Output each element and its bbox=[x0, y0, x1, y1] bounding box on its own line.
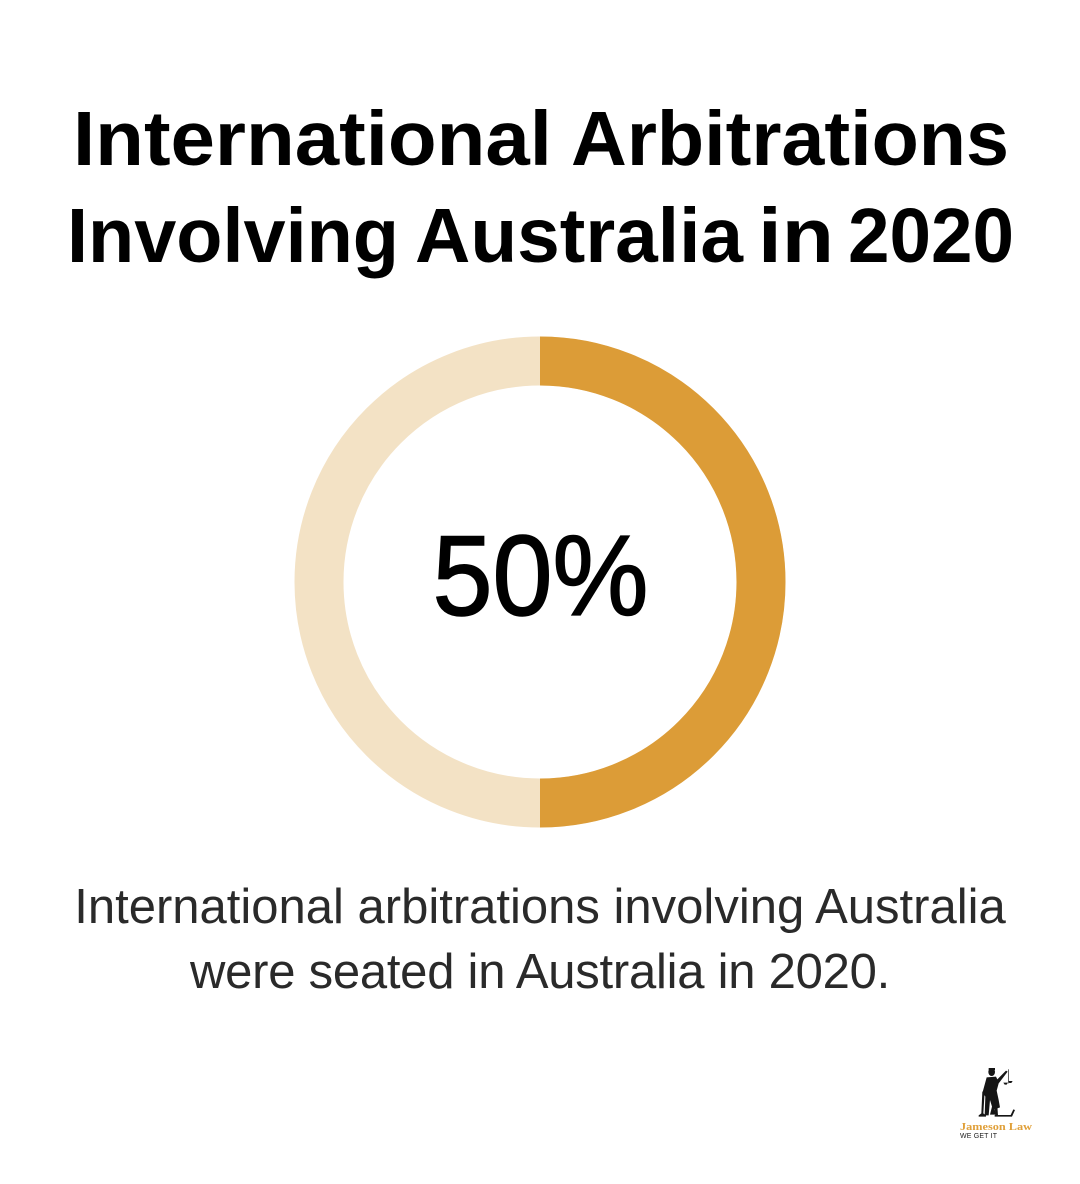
title: 2020 bbox=[848, 193, 1014, 279]
logo name: Jameson Law bbox=[960, 1121, 1032, 1133]
logo tagline: WE GET IT bbox=[960, 1133, 998, 1140]
title bbox=[67, 100, 1014, 279]
title: Involving bbox=[67, 193, 399, 279]
description text: International arbitrations involving Australia bbox=[74, 880, 1006, 934]
description text: were seated in Australia in 2020. bbox=[190, 945, 890, 999]
donut chart: 50% bbox=[432, 513, 648, 640]
logo bbox=[960, 1068, 1032, 1140]
description text bbox=[74, 880, 1006, 999]
title: Australia bbox=[415, 193, 744, 279]
title: in bbox=[758, 193, 834, 279]
icon: justice figure bbox=[979, 1068, 1015, 1117]
